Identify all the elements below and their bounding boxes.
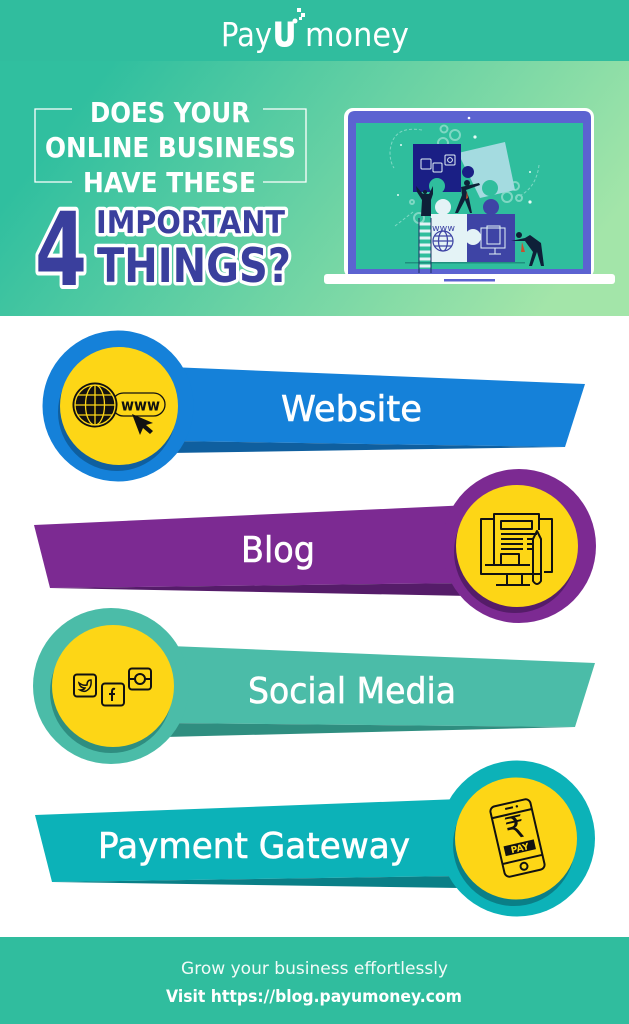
banner [35, 799, 460, 882]
item: Blog [34, 469, 596, 623]
banner [34, 505, 470, 588]
heading emphasis: 4 important things [35, 191, 291, 310]
icon: monitor, article and pencil [481, 514, 552, 585]
heading text: HAVE THESE [83, 166, 256, 199]
footer [0, 937, 629, 1024]
header band with logo [0, 0, 629, 61]
label: Payment Gateway [98, 826, 410, 867]
item: Website [42, 330, 585, 482]
hero panel [0, 61, 629, 316]
heading emphasis: 4 important things: IMPORTANT [96, 205, 285, 241]
laptop illustration: www [432, 224, 455, 234]
banner [170, 367, 585, 447]
puzzle icons [421, 155, 505, 254]
item: Payment Gateway [35, 760, 595, 916]
footer: Visit https://blog.payumoney.com [166, 987, 462, 1007]
label: Website [281, 389, 422, 430]
icon: globe with www and cursor [72, 382, 165, 435]
header band with logo: Pay [221, 15, 272, 54]
heading text [45, 96, 296, 199]
icon: globe with www and cursor: www [121, 396, 160, 414]
laptop illustration [324, 108, 615, 284]
footer: Grow your business effortlessly [181, 959, 448, 979]
puzzle pieces [458, 142, 515, 198]
icon: smartphone with rupee and pay [489, 798, 546, 878]
heading text: DOES YOUR [90, 96, 250, 129]
business people [416, 180, 544, 266]
icon: smartphone with rupee and pay: PAY [510, 842, 531, 856]
heading frame [35, 109, 306, 182]
decoration: gears and dashes [390, 126, 539, 226]
heading emphasis: 4 important things: 4 [35, 191, 87, 310]
ladder [419, 218, 431, 273]
icon: social media squares [74, 668, 151, 706]
label: Social Media [248, 671, 456, 712]
header band with logo: money [305, 15, 409, 54]
icon: smartphone with rupee and pay: ₹ [502, 808, 529, 848]
label: Blog [241, 530, 315, 571]
item: Social Media [33, 608, 595, 764]
heading text: ONLINE BUSINESS [45, 131, 296, 164]
heading emphasis: 4 important things: THINGS? [97, 239, 291, 294]
banner [170, 646, 595, 727]
header band with logo: U [273, 15, 296, 54]
